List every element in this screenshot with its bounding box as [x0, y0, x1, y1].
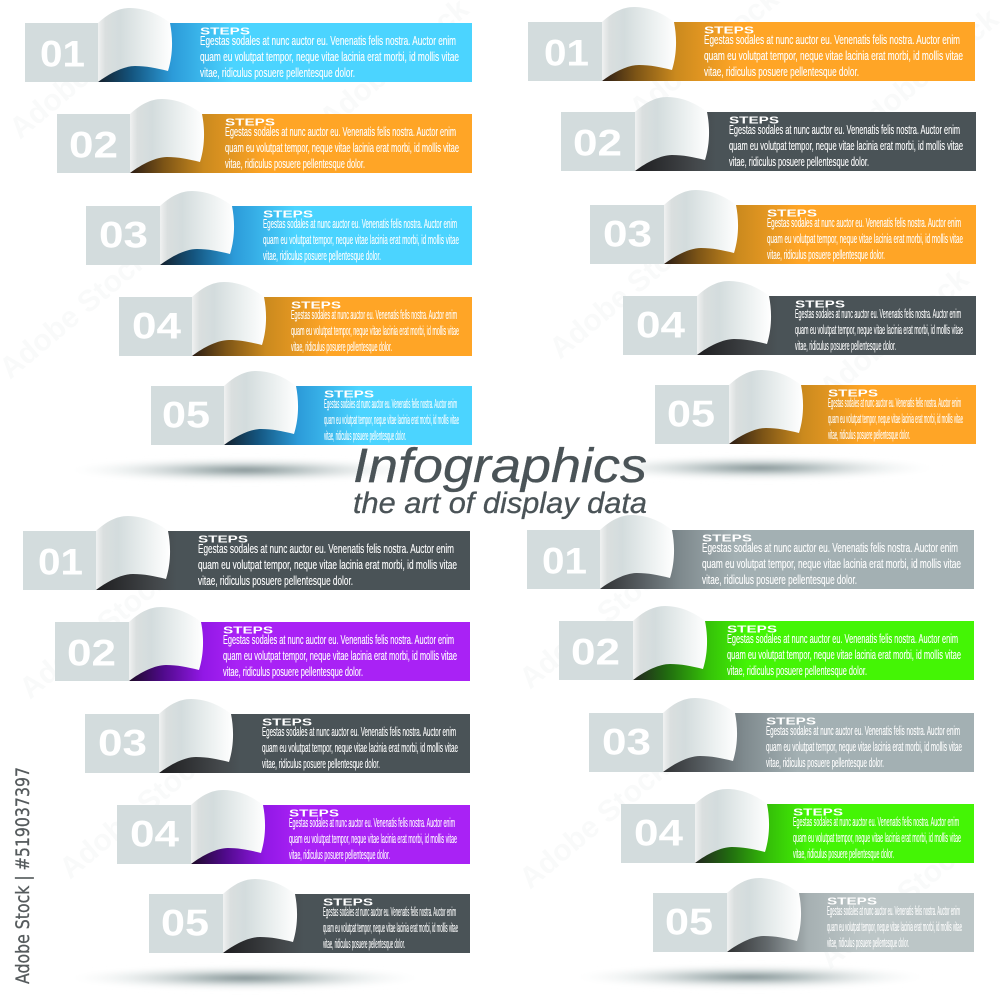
step 03 dark: quam eu volutpat tempor, neque vitae lacinia erat morbi, id mollis vitae: [262, 741, 458, 755]
step 01 blue: [25, 8, 472, 82]
step 02 orange: Egestas sodales at nunc auctor eu. Venenatis felis nostra. Auctor enim: [225, 125, 456, 139]
background watermark: Adobe Stock: [3, 2, 165, 145]
step 02 green: STEPS: [727, 624, 777, 636]
step 04 orange: vitae, ridiculus posuere pellentesque dolor.: [291, 340, 392, 354]
step 02 purple: Egestas sodales at nunc auctor eu. Venenatis felis nostra. Auctor enim: [223, 633, 454, 647]
step 02 green: 02: [571, 632, 620, 672]
step 03 grey: vitae, ridiculus posuere pellentesque dolor.: [766, 756, 884, 770]
step 03 grey: 03: [602, 722, 651, 762]
step 02 orange: STEPS: [225, 118, 275, 128]
step 05 light grey: STEPS: [827, 896, 877, 908]
step 05 blue: STEPS: [324, 390, 374, 400]
panel: top left steps: [25, 8, 472, 445]
step 02 dark: 02: [573, 122, 622, 164]
text: Egestas sodales at nunc auctor eu. Venenatis felis nostra. Auctor enim: [323, 905, 456, 919]
title: Infographics: [353, 440, 647, 493]
step 02 purple: 02: [67, 632, 116, 674]
step 04 green: STEPS: [793, 808, 843, 818]
step 04 purple: vitae, ridiculus posuere pellentesque dolor.: [289, 848, 390, 862]
step 05 blue: [151, 371, 472, 445]
subtitle: the art of display data: [353, 487, 647, 520]
step 01 dark: vitae, ridiculus posuere pellentesque dolor.: [198, 574, 353, 588]
step 03 dark: Egestas sodales at nunc auctor eu. Venenatis felis nostra. Auctor enim: [262, 725, 456, 739]
background watermark: Adobe Stock: [13, 562, 175, 705]
step 01 dark: STEPS: [198, 534, 248, 546]
step 03 blue: STEPS: [263, 210, 313, 220]
step 01 dark: 01: [38, 542, 83, 582]
step 05 dark: 05: [161, 902, 209, 944]
step 01 blue: Egestas sodales at nunc auctor eu. Venenatis felis nostra. Auctor enim: [200, 34, 456, 48]
step 01 orange: 01: [544, 32, 589, 74]
shadow: bottom left: [60, 965, 430, 991]
step 05 dark: STEPS: [323, 898, 373, 908]
step 01 dark: Egestas sodales at nunc auctor eu. Venenatis felis nostra. Auctor enim: [198, 542, 454, 556]
step 01 grey: [527, 515, 974, 589]
step 04 green: 04: [634, 812, 684, 854]
step 03 blue: 03: [99, 214, 148, 256]
step 03 orange: [590, 190, 976, 264]
step 01 orange: vitae, ridiculus posuere pellentesque dolor.: [704, 65, 859, 79]
step 05 blue: vitae, ridiculus posuere pellentesque dolor.: [324, 429, 406, 443]
step 04 dark: STEPS: [795, 300, 845, 310]
step 04 dark: [623, 281, 976, 355]
step 03 blue: quam eu volutpat tempor, neque vitae lacinia erat morbi, id mollis vitae: [263, 233, 459, 247]
stock id side label: Adobe Stock | #519037397: [12, 767, 34, 984]
step 04 green: [621, 789, 974, 863]
panel: top right steps: [528, 7, 976, 444]
step 04 dark: 04: [636, 304, 686, 346]
step 03 dark: vitae, ridiculus posuere pellentesque dolor.: [262, 757, 380, 771]
background watermark: Adobe Stock: [513, 552, 675, 695]
step 01 grey: 01: [542, 540, 587, 582]
text: Egestas sodales at nunc auctor eu. Venenatis felis nostra. Auctor enim: [324, 397, 457, 411]
step 02 orange: 02: [69, 124, 118, 166]
step 04 orange: 04: [132, 306, 182, 346]
step 03 dark: [85, 699, 470, 773]
step 01 blue: quam eu volutpat tempor, neque vitae lacinia erat morbi, id mollis vitae: [200, 50, 459, 64]
step 04 purple: 04: [130, 814, 180, 854]
step 05 dark: [149, 879, 470, 953]
step 01 dark: [23, 516, 470, 590]
step 01 grey: STEPS: [702, 534, 752, 544]
step 02 orange: quam eu volutpat tempor, neque vitae lacinia erat morbi, id mollis vitae: [225, 141, 459, 155]
step 05 light grey: [653, 878, 974, 952]
text: quam eu volutpat tempor, neque vitae lacinia erat morbi, id mollis vitae: [289, 832, 457, 846]
shadow: bottom right: [565, 964, 935, 990]
shadow: top right: [575, 455, 945, 481]
step 02 green: [559, 606, 974, 680]
step 01 orange: STEPS: [704, 26, 754, 36]
step 04 orange: STEPS: [291, 300, 341, 312]
step 02 purple: quam eu volutpat tempor, neque vitae lacinia erat morbi, id mollis vitae: [223, 649, 457, 663]
step 02 dark: vitae, ridiculus posuere pellentesque dolor.: [729, 155, 869, 169]
step 05 blue: 05: [162, 394, 210, 436]
background watermark: Adobe Stock: [513, 752, 675, 895]
shadow: top left: [60, 457, 430, 483]
step 03 dark: STEPS: [262, 718, 312, 728]
step 03 grey: [589, 698, 974, 772]
step 03 blue: Egestas sodales at nunc auctor eu. Venenatis felis nostra. Auctor enim: [263, 217, 457, 231]
step 05 dark: vitae, ridiculus posuere pellentesque dolor.: [323, 937, 405, 951]
text: quam eu volutpat tempor, neque vitae lacinia erat morbi, id mollis vitae: [324, 413, 459, 427]
step 04 orange: [119, 282, 472, 356]
step 02 dark: STEPS: [729, 116, 779, 126]
step 03 orange: 03: [603, 214, 652, 254]
step 03 dark: 03: [98, 722, 147, 764]
step 05 light grey: 05: [665, 902, 713, 942]
text: Egestas sodales at nunc auctor eu. Venenatis felis nostra. Auctor enim: [289, 816, 455, 830]
step 03 orange: STEPS: [767, 208, 817, 220]
step 02 purple: STEPS: [223, 626, 273, 636]
background watermark: Adobe Stock: [813, 262, 975, 405]
step 01 dark: quam eu volutpat tempor, neque vitae lacinia erat morbi, id mollis vitae: [198, 558, 457, 572]
step 03 blue: vitae, ridiculus posuere pellentesque dolor.: [263, 249, 381, 263]
step 05 orange: 05: [667, 394, 715, 434]
step 02 orange: vitae, ridiculus posuere pellentesque dolor.: [225, 157, 365, 171]
step 02 orange: [57, 99, 472, 173]
background watermark: Adobe Stock: [813, 832, 975, 975]
step 03 blue: [86, 191, 472, 265]
step 01 grey: vitae, ridiculus posuere pellentesque dolor.: [702, 573, 857, 587]
step 04 purple: STEPS: [289, 808, 339, 820]
step 05 orange: STEPS: [828, 388, 878, 400]
step 04 purple: [117, 790, 470, 864]
step 02 green: vitae, ridiculus posuere pellentesque dolor.: [727, 664, 867, 678]
step 02 dark: [561, 97, 976, 171]
text: quam eu volutpat tempor, neque vitae lacinia erat morbi, id mollis vitae: [291, 324, 459, 338]
step 03 orange: vitae, ridiculus posuere pellentesque dolor.: [767, 248, 885, 262]
text: quam eu volutpat tempor, neque vitae lacinia erat morbi, id mollis vitae: [323, 921, 458, 935]
background watermark: Adobe Stock: [543, 222, 705, 365]
step 02 purple: [55, 607, 470, 681]
step 03 grey: STEPS: [766, 716, 816, 728]
background watermark: Adobe Stock: [53, 742, 215, 885]
step 05 orange: [655, 370, 976, 444]
step 01 blue: STEPS: [200, 26, 250, 38]
panel: bottom left steps: [23, 516, 470, 953]
step 01 blue: vitae, ridiculus posuere pellentesque dolor.: [200, 66, 355, 80]
step 01 blue: 01: [40, 34, 85, 74]
step 02 purple: vitae, ridiculus posuere pellentesque dolor.: [223, 665, 363, 679]
step 01 orange: [528, 7, 975, 81]
text: Egestas sodales at nunc auctor eu. Venenatis felis nostra. Auctor enim: [291, 308, 457, 322]
panel: bottom right steps: [527, 515, 974, 952]
